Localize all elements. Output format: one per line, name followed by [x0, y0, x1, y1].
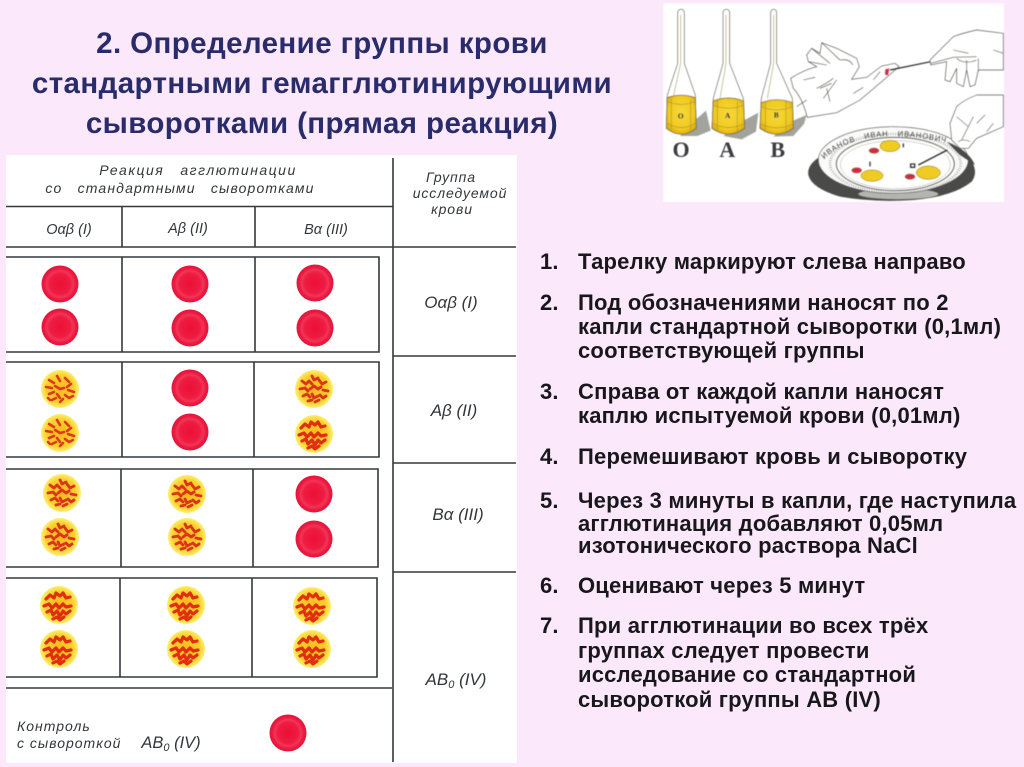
- table headings: Oαβ (I): [46, 222, 92, 238]
- step 2: 2.: [540, 290, 559, 315]
- table headings: исследуемой: [413, 185, 507, 201]
- table headings: AB: [141, 734, 163, 752]
- step 4: Перемешивают кровь и сыворотку: [578, 444, 967, 469]
- plate marks: [870, 143, 915, 167]
- step 1: Тарелку маркируют слева направо: [578, 249, 966, 274]
- step 5: агглютинация добавляют 0,05мл: [578, 510, 943, 536]
- title: сыворотками (прямая реакция): [86, 107, 558, 140]
- step 2: капли стандартной сыворотки (0,1мл): [578, 314, 1001, 339]
- step 3: [540, 379, 960, 428]
- plate: ИВАНОВ ИВАН ИВАНОВИЧ: [820, 130, 947, 160]
- step 7: При агглютинации во всех трёх: [578, 613, 928, 638]
- lower right hand: [950, 95, 1003, 148]
- step 7: исследование со стандартной: [578, 662, 916, 687]
- lancet: [890, 62, 931, 70]
- title: 2. Определение группы крови: [96, 27, 548, 60]
- table headings: с сывороткой: [17, 735, 121, 751]
- table headings: крови: [431, 201, 473, 217]
- table headings: Aβ (II): [167, 221, 208, 237]
- title: [32, 27, 612, 140]
- flask letters: A: [719, 137, 735, 162]
- table headings: [17, 162, 507, 754]
- step 2: [540, 290, 1001, 363]
- numbered steps: [540, 249, 1016, 712]
- table headings: Группа: [426, 169, 476, 185]
- table headings: 0: [448, 679, 455, 691]
- table headings: со стандартными сыворотками: [45, 180, 315, 196]
- panel: agglutination table: [6, 155, 517, 763]
- flask letters: B: [770, 137, 785, 162]
- left hand: [791, 43, 899, 117]
- step 7: группах следует провести: [578, 638, 870, 662]
- step 7: [540, 613, 928, 712]
- step 3: 3.: [540, 379, 559, 404]
- table headings: (IV): [169, 734, 201, 752]
- step 5: изотонического раствора NaCl: [578, 533, 918, 558]
- table headings: Контроль: [17, 718, 91, 734]
- table headings: Aβ (II): [430, 401, 477, 420]
- flask A: [712, 9, 745, 134]
- row 2 drops: A group: [41, 370, 333, 453]
- table headings: Bα (III): [304, 222, 348, 238]
- step 4: 4.: [540, 444, 559, 469]
- row 1 drops: O serum group: [42, 264, 334, 346]
- step 7: сывороткой группы АВ (IV): [578, 686, 881, 712]
- step 6: Оценивают через 5 минут: [578, 573, 865, 598]
- title: стандартными гемагглютинирующими: [32, 67, 612, 100]
- table headings: (IV): [454, 670, 486, 689]
- flask letters: O: [678, 111, 684, 120]
- step 2: Под обозначениями наносят по 2: [578, 290, 949, 315]
- flask letters: O: [672, 137, 690, 162]
- table headings: 0: [163, 742, 170, 754]
- step 1: 1.: [540, 249, 559, 274]
- control drop: [270, 714, 306, 752]
- table headings: Oαβ (I): [424, 293, 478, 312]
- table headings: Реакция агглютинации: [99, 162, 297, 178]
- step 2: соответствующей группы: [578, 338, 865, 363]
- row 4 drops: AB group: [40, 586, 331, 668]
- step 7: 7.: [540, 613, 559, 638]
- step 6: 6.: [540, 573, 559, 598]
- step 5: Через 3 минуты в капли, где наступила: [578, 488, 1016, 513]
- step 5: 5.: [540, 488, 559, 513]
- table headings: AB: [426, 670, 448, 689]
- step 3: каплю испытуемой крови (0,01мл): [578, 403, 960, 428]
- flask letters: B: [774, 110, 779, 119]
- flask B: [760, 9, 793, 134]
- flask O: [666, 9, 696, 134]
- row 3 drops: B group: [41, 474, 332, 558]
- plate: [807, 126, 976, 202]
- table headings: Bα (III): [432, 505, 484, 524]
- step 3: Справа от каждой капли наносят: [578, 379, 944, 404]
- flask letters: [672, 110, 785, 162]
- step 5: [540, 488, 1016, 558]
- flask letters: A: [725, 111, 731, 120]
- upper right hand: [930, 30, 1003, 87]
- glass rod: [918, 150, 947, 165]
- flask shadows: [680, 111, 807, 139]
- plate drops: [852, 140, 940, 181]
- illustration: flasks, hands and plate: [663, 3, 1004, 202]
